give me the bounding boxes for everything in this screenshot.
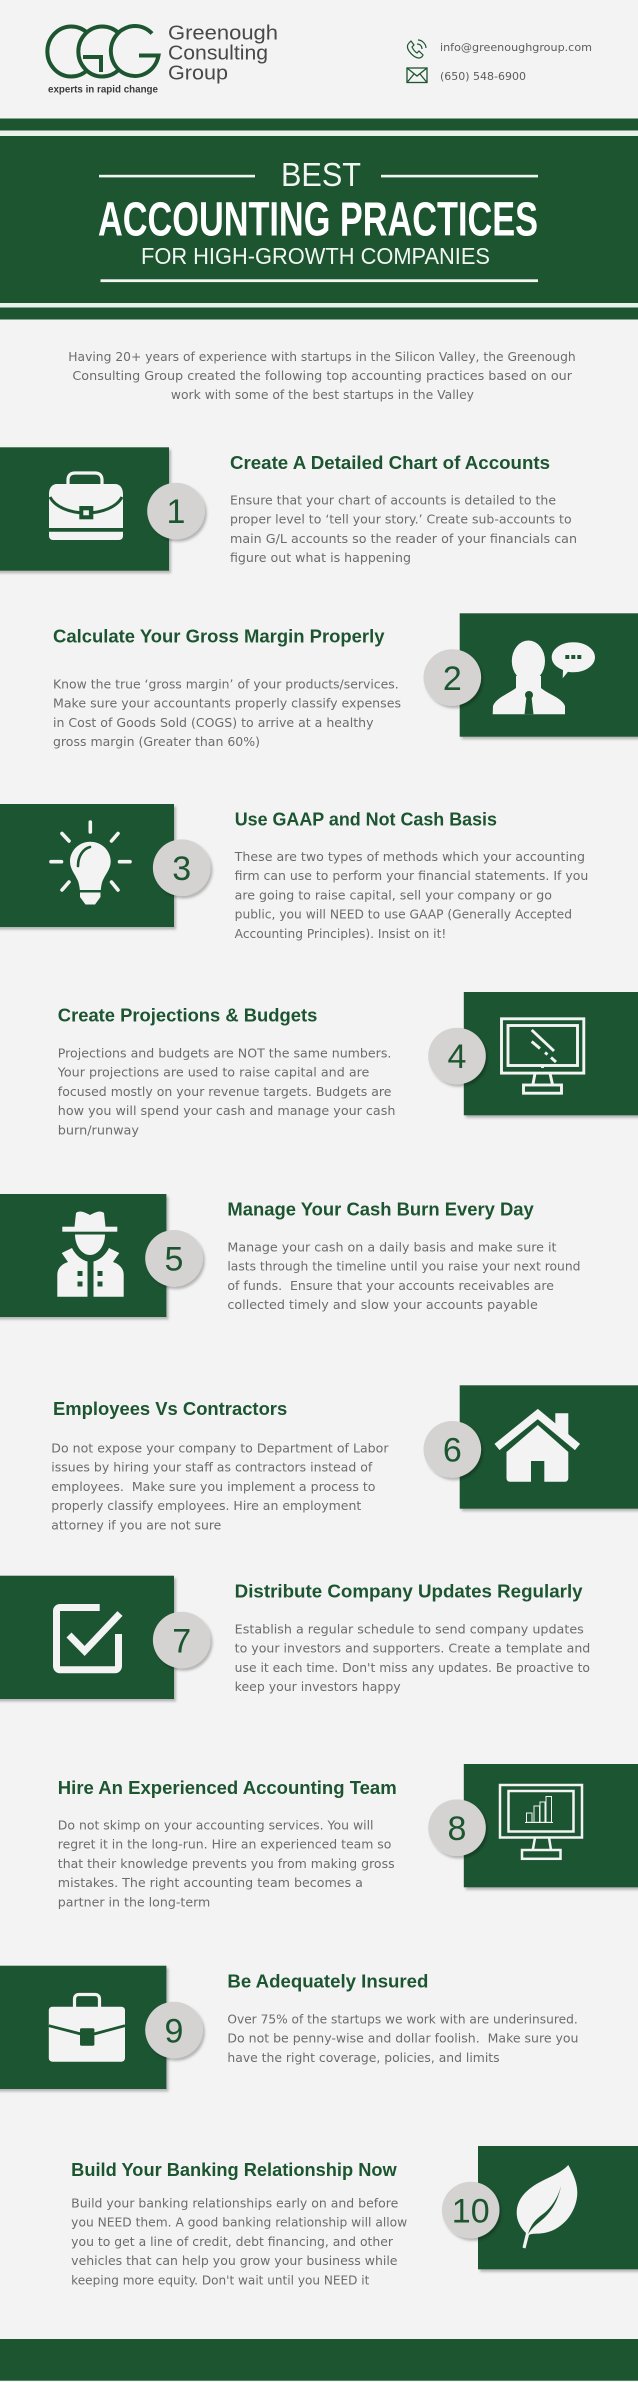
intro paragraph: Having 20+ years of experience with startups in the Silicon Valley, the Greenough	[68, 350, 576, 364]
body 4	[57, 1046, 395, 1137]
number badge 3: 3	[172, 850, 191, 888]
intro paragraph	[68, 350, 576, 402]
body 8: mistakes. The right accounting team becomes a	[58, 1876, 363, 1890]
number badge 9: 9	[165, 2012, 183, 2050]
icon: briefcase	[49, 1994, 125, 2062]
body 3: firm can use to perform your financial statements. If you	[235, 869, 588, 883]
body 1: main G/L accounts so the reader of your financials can	[230, 532, 577, 546]
panel 3	[0, 804, 174, 927]
icon: house	[497, 1413, 578, 1482]
logo company name: Consulting	[168, 42, 268, 64]
subheading: FOR HIGH-GROWTH COMPANIES	[141, 243, 490, 269]
body 10	[71, 2196, 407, 2287]
body 6: properly classify employees. Hire an employment	[51, 1499, 362, 1513]
panel 7	[0, 1576, 174, 1699]
body 10: you NEED them. A good banking relationship will allow	[71, 2216, 407, 2230]
body 8: regret it in the long-run. Hire an experienced team so	[58, 1838, 391, 1852]
body 9: have the right coverage, policies, and limits	[227, 2051, 500, 2065]
body 3: Accounting Principles). Insist on it!	[235, 927, 446, 941]
icon: monitor with glare	[502, 1019, 584, 1093]
body 4: Your projections are used to raise capital and are	[57, 1066, 369, 1080]
body 5: Manage your cash on a daily basis and make sure it	[227, 1240, 557, 1254]
logo mark: GCG rings	[47, 26, 158, 76]
icon: light bulb	[51, 822, 130, 904]
title rules	[99, 175, 538, 282]
body 9	[227, 2012, 578, 2065]
body 6: employees. Make sure you implement a process to	[51, 1480, 376, 1494]
icon: envelope	[407, 68, 427, 82]
body 1: proper level to ‘tell your story.’ Create sub-accounts to	[230, 513, 572, 527]
practice 5	[0, 1194, 580, 1317]
body 4: Projections and budgets are NOT the same numbers.	[58, 1046, 391, 1060]
body 1: figure out what is happening	[230, 551, 411, 565]
number badge 6: 6	[443, 1432, 462, 1470]
icon: man in hat and coat	[57, 1212, 124, 1297]
panel 8	[464, 1764, 638, 1887]
heading: best: BEST	[281, 156, 361, 193]
number badge 5: 5	[165, 1240, 183, 1278]
practice 8	[58, 1764, 638, 1909]
practice 2	[53, 613, 638, 749]
body 9: Over 75% of the startups we work with are underinsured.	[227, 2012, 578, 2026]
body 7: keep your investors happy	[235, 1680, 401, 1694]
body 5	[227, 1240, 580, 1312]
body 7	[235, 1622, 590, 1694]
logo company name: Group	[168, 62, 228, 84]
practice 10	[71, 2146, 638, 2287]
heading 9: Be Adequately Insured	[227, 1972, 428, 1992]
heading 10: Build Your Banking Relationship Now	[71, 2160, 398, 2180]
intro paragraph: work with some of the best startups in the Valley	[171, 388, 474, 402]
body 2: Make sure your accountants properly classify expenses	[53, 697, 401, 711]
body 3: These are two types of methods which your accounting	[234, 850, 585, 864]
body 4: how you will spend your cash and manage your cash	[58, 1104, 395, 1118]
panel 4	[464, 992, 638, 1115]
body 1: Ensure that your chart of accounts is detailed to the	[230, 494, 556, 508]
heading 4: Create Projections & Budgets	[58, 1006, 317, 1026]
practice 6	[51, 1385, 638, 1532]
body 1	[230, 494, 577, 565]
logo tagline: experts in rapid change	[48, 84, 158, 96]
number badge 2: 2	[443, 660, 462, 698]
icon: person with speech bubble	[493, 640, 595, 714]
body 2: Know the true ‘gross margin’ of your products/services.	[53, 678, 399, 692]
heading 3: Use GAAP and Not Cash Basis	[235, 810, 497, 830]
panel 1	[0, 447, 169, 571]
icon: leaf	[517, 2165, 577, 2248]
number badge 5	[145, 1230, 203, 1287]
practice 3	[0, 804, 588, 941]
body 10: you to get a line of credit, debt financing, and other	[71, 2235, 393, 2249]
body 2	[53, 678, 401, 749]
panel 9	[0, 1966, 166, 2089]
body 3: are going to raise capital, sell your company or go	[235, 888, 552, 902]
icon: monitor with bar chart	[500, 1785, 582, 1859]
number badge 1: 1	[167, 493, 185, 531]
number badge 4: 4	[448, 1038, 466, 1076]
number badge 8: 8	[448, 1810, 466, 1848]
number badge 1	[147, 483, 205, 539]
heading 2: Calculate Your Gross Margin Properly	[53, 626, 384, 646]
body 10: Build your banking relationships early on and before	[71, 2196, 398, 2210]
body 8: that their knowledge prevents you from making gross	[58, 1857, 395, 1871]
practice 1	[0, 447, 577, 571]
body 6: attorney if you are not sure	[51, 1518, 221, 1532]
body 2: gross margin (Greater than 60%)	[53, 735, 260, 749]
panel 2	[460, 613, 638, 737]
body 4: burn/runway	[58, 1123, 139, 1137]
number badge 7: 7	[172, 1622, 191, 1660]
body 7: to your investors and supporters. Create a template and	[235, 1642, 590, 1656]
number badge 4	[428, 1028, 486, 1084]
body 8: Do not skimp on your accounting services. You will	[58, 1818, 374, 1832]
logo company name	[168, 22, 278, 84]
header: logo and contact	[47, 22, 592, 96]
practice 7	[0, 1576, 590, 1699]
practice 9	[0, 1966, 578, 2089]
heading 7: Distribute Company Updates Regularly	[235, 1582, 583, 1602]
number badge 10	[442, 2182, 500, 2238]
icon: check box	[56, 1608, 120, 1670]
number badge 7	[153, 1612, 210, 1668]
heading 6: Employees Vs Contractors	[53, 1399, 287, 1419]
title banner	[0, 118, 638, 320]
heading 1: Create A Detailed Chart of Accounts	[230, 453, 550, 473]
number badge 9	[145, 2002, 203, 2058]
body 8	[58, 1818, 395, 1909]
body 3: public, you will NEED to use GAAP (Generally Accepted	[235, 908, 572, 922]
body 6: Do not expose your company to Department of Labor	[51, 1442, 389, 1456]
heading 8: Hire An Experienced Accounting Team	[58, 1778, 397, 1798]
footer band	[0, 2339, 638, 2381]
body 7: Establish a regular schedule to send company updates	[235, 1622, 584, 1636]
body 3	[234, 850, 588, 941]
body 9: Do not be penny-wise and dollar foolish. Make sure you	[227, 2032, 578, 2046]
logo company name: Greenough	[168, 22, 278, 44]
body 5: lasts through the timeline until you raise your next round	[227, 1260, 580, 1274]
banner background bands	[0, 118, 638, 320]
phone number: (650) 548-6900	[440, 70, 526, 83]
panel 10	[478, 2146, 638, 2269]
number badge 8	[428, 1799, 486, 1856]
practice 4	[57, 992, 638, 1137]
body 4: focused mostly on your revenue targets. Budgets are	[58, 1085, 391, 1099]
heading 5: Manage Your Cash Burn Every Day	[227, 1200, 534, 1220]
body 2: in Cost of Goods Sold (COGS) to arrive at a healthy	[53, 716, 374, 730]
body 10: keeping more equity. Don't wait until you NEED it	[71, 2273, 370, 2287]
body 7: use it each time. Don't miss any updates. Be proactive to	[235, 1661, 590, 1675]
number badge 6	[424, 1421, 481, 1478]
number badge 3	[153, 839, 210, 896]
body 8: partner in the long-term	[58, 1895, 210, 1909]
panel 6	[460, 1385, 638, 1509]
body 6	[51, 1442, 389, 1532]
panel 5	[0, 1194, 166, 1317]
email address: info@greenoughgroup.com	[440, 41, 592, 54]
body 6: issues by hiring your staff as contractors instead of	[51, 1461, 373, 1475]
body 10: vehicles that can help you grow your business while	[71, 2254, 397, 2268]
number badge 10: 10	[452, 2192, 490, 2230]
body 5: collected timely and slow your accounts payable	[227, 1298, 538, 1312]
intro paragraph: Consulting Group created the following top accounting practices based on our	[72, 369, 572, 383]
icon: handbag briefcase	[49, 473, 123, 540]
number badge 2	[424, 649, 481, 706]
body 5: of funds. Ensure that your accounts receivables are	[227, 1279, 554, 1293]
icon: phone	[408, 40, 426, 58]
